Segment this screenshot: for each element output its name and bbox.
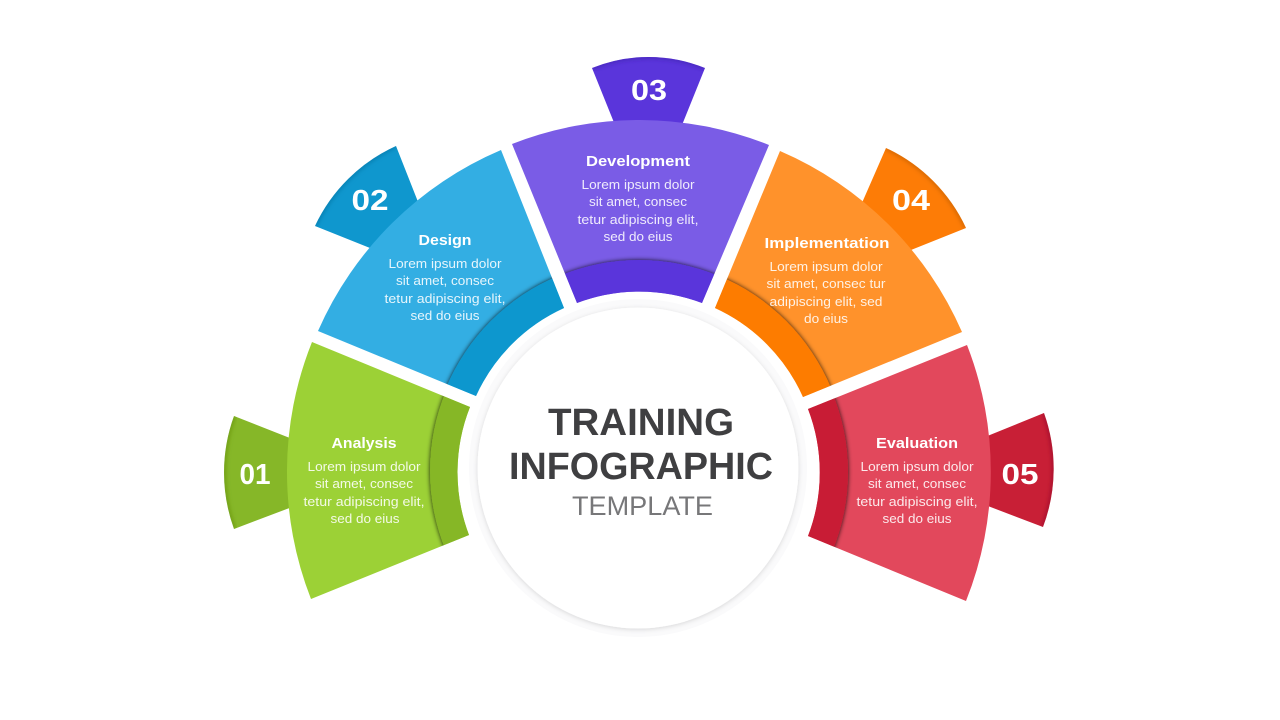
segment: purple [512, 120, 769, 303]
text: Development: sit amet, consec [589, 194, 688, 209]
text: Evaluation: Evaluation [876, 435, 958, 452]
title: TEMPLATE [572, 491, 713, 521]
text: Development [578, 153, 698, 244]
number tab 03 [592, 57, 705, 130]
panel: 02 Design [315, 146, 564, 396]
text: Evaluation: sed do eius [882, 511, 952, 526]
text: Design: sit amet, consec [396, 273, 495, 288]
number tab 01: 01 [240, 459, 270, 491]
text: Evaluation: sit amet, consec [868, 476, 967, 491]
number tab 05: 05 [1002, 459, 1038, 491]
text: Evaluation: Lorem ipsum dolor [860, 459, 974, 474]
text: Design: sed do eius [410, 308, 480, 323]
text: Evaluation [856, 435, 978, 526]
panel: 01 Analysis [224, 342, 470, 599]
text: Design: tetur adipiscing elit, [384, 291, 506, 306]
text: Analysis: tetur adipiscing elit, [304, 494, 424, 509]
text: Implementation: Implementation [764, 235, 890, 252]
number tab 04 [858, 148, 966, 254]
panel: 05 Evaluation [808, 345, 1054, 601]
segment: red [808, 345, 991, 601]
text: Analysis: sed do eius [330, 511, 400, 526]
number tab 01 [224, 416, 289, 529]
panel: 03 Development [512, 57, 769, 303]
number tab 03: 03 [631, 75, 667, 107]
number tab 05 [988, 413, 1054, 527]
text: Implementation: do eius [804, 311, 849, 326]
number tab 02 [315, 146, 422, 252]
text: Analysis: sit amet, consec [315, 476, 414, 491]
text: Analysis: Lorem ipsum dolor [308, 459, 421, 474]
text: Implementation: sit amet, consec tur [766, 276, 886, 291]
text: Implementation: adipiscing elit, sed [770, 294, 882, 309]
text: Design [384, 232, 506, 323]
text: Development: Development [586, 153, 690, 170]
text: Development: Lorem ipsum dolor [582, 177, 695, 192]
number tab 02: 02 [352, 185, 388, 217]
center circle [469, 299, 807, 637]
segment: green [287, 342, 470, 599]
text: Design: Design [418, 232, 472, 249]
segment: blue [318, 150, 564, 396]
text: Analysis [304, 435, 424, 526]
text: Implementation: Lorem ipsum dolor [770, 259, 883, 274]
text: Design: Lorem ipsum dolor [388, 256, 502, 271]
panel: 04 Implementation [715, 148, 966, 397]
title: INFOGRAPHIC [509, 446, 773, 488]
text: Analysis: Analysis [332, 435, 396, 452]
text: Development: sed do eius [604, 229, 673, 244]
text: Evaluation: tetur adipiscing elit, [856, 494, 978, 509]
title [509, 402, 773, 521]
title: TRAINING [548, 402, 734, 444]
text: Development: tetur adipiscing elit, [578, 212, 698, 227]
text: Implementation [764, 235, 890, 326]
segment: orange [715, 151, 962, 397]
number tab 04: 04 [892, 185, 930, 217]
